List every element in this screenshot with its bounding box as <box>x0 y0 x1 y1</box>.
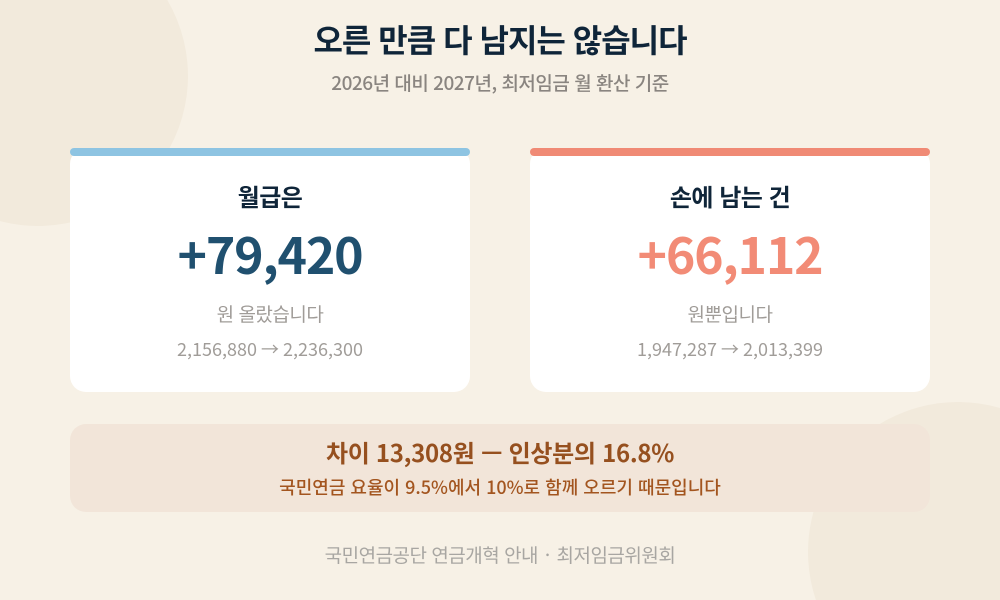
callout headline: 차이 13,308원 — 인상분의 16.8% <box>326 434 674 469</box>
text: salary range: 2,156,880 → 2,236,300 <box>177 336 363 362</box>
callout detail: 국민연금 요율이 9.5%에서 10%로 함께 오르기 때문입니다 <box>279 474 721 500</box>
text: won increased: 원 올랐습니다 <box>217 300 323 327</box>
big number: salary increase: +79,420 <box>178 217 362 289</box>
panel: salary increase <box>70 148 470 392</box>
panel heading: take-home: 손에 남는 건 <box>670 178 790 213</box>
subtitle: 2026년 대비 2027년, 최저임금 월 환산 기준 <box>331 69 669 96</box>
title: 오른 만큼 다 남지는 않습니다 <box>313 16 687 62</box>
panel top bar: blue <box>70 148 470 156</box>
text: take-home range: 1,947,287 → 2,013,399 <box>637 336 823 362</box>
panel top bar: coral <box>530 148 930 156</box>
panel heading: salary: 월급은 <box>238 178 302 213</box>
panel: take-home increase <box>530 148 930 392</box>
callout: difference explanation <box>70 424 930 512</box>
source footer: 국민연금공단 연금개혁 안내 · 최저임금위원회 <box>325 541 675 568</box>
big number: take-home increase: +66,112 <box>638 217 822 289</box>
text: only won: 원뿐입니다 <box>688 300 772 327</box>
